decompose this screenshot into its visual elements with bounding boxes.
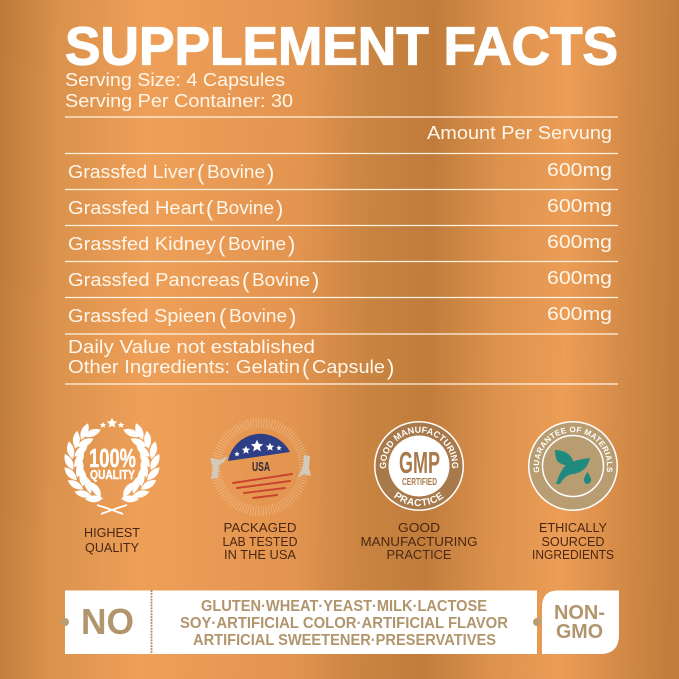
label: good manufacturing practice: MANUFACTURING [360,534,478,549]
icon text: GMP certified [399,445,440,488]
row: spleen: Grassfed Spieen [68,306,216,326]
row: liver: 600mg [547,160,612,180]
row: pancreas [68,268,612,293]
row: spleen [68,304,612,329]
row: heart: Grassfed Heart [68,198,204,218]
table header: Amount Per Servung [427,123,612,143]
footnotes: Capsule [312,357,385,377]
serving information: Serving Size: 4 Capsules [65,70,285,90]
icon: laurel wreath [62,418,162,514]
label: highest quality [84,525,140,555]
row: liver: ( [197,160,205,185]
icon: seal rings [528,421,618,511]
panel: non-GMO tag [542,590,619,654]
label: ethically sourced ingredients [532,520,614,562]
row: kidney: 600mg [547,232,612,252]
panel: non-GMO tag: GMO [556,621,603,643]
excluded ingredients list: GLUTEN·WHEAT·YEAST·MILK·LACTOSE [201,598,487,615]
panel: free-from banner [61,590,541,654]
NO text: NO [81,601,134,642]
row: liver: Grassfed Liver [68,162,195,182]
footnotes: Other Ingredients: Gelatin [68,357,300,377]
icon text: 100% quality: 100% [89,443,136,473]
badge: guarantee of materials [528,421,618,562]
row: heart [68,196,612,221]
row: heart: Bovine [216,198,274,218]
icon text: 100% quality [89,443,136,482]
label: ethically sourced ingredients: ETHICALLY [539,520,607,535]
row: heart: ( [206,196,214,221]
row: pancreas: ) [312,268,319,293]
icon: blue dome with stars [228,434,290,461]
row: kidney: Grassfed Kidney [68,234,216,254]
label: ethically sourced ingredients: SOURCED [542,534,604,549]
row: spleen: Bovine [229,306,287,326]
footnotes: Daily Value not established [68,337,315,357]
label: highest quality: HIGHEST [84,525,140,540]
row: liver: Bovine [207,162,265,182]
row: spleen: ( [219,304,227,329]
row: pancreas: Grassfed Pancreas [68,270,240,290]
label: good manufacturing practice [360,520,478,562]
icon: red stripes [233,474,292,498]
icon text: ring text: PRACTICE [394,492,444,506]
supplement facts table [65,117,618,384]
label: packaged lab tested: IN THE USA [224,547,296,562]
label: packaged lab tested: PACKAGED [224,520,296,535]
row: kidney: ( [218,232,226,257]
panel: non-GMO tag: NON- [554,602,605,624]
icon text: 100% quality: QUALITY [90,468,136,482]
row: pancreas: 600mg [547,268,612,288]
row: kidney: ) [288,232,295,257]
icon text: GMP certified: GMP [399,445,440,480]
label: ethically sourced ingredients: INGREDIENTS [532,547,614,562]
serving information: Serving Per Container: 30 [65,91,293,111]
row: kidney [68,232,612,257]
row: heart: 600mg [547,196,612,216]
label: packaged lab tested [222,520,298,562]
badge: 100% quality [62,418,162,555]
row: kidney: Bovine [228,234,286,254]
icon text: GMP certified: CERTIFIED [402,477,437,488]
icon: teal leaves and drop [555,450,591,484]
serving information [65,70,293,111]
excluded ingredients list: ARTIFICIAL SWEETENER·PRESERVATIVES [193,632,496,649]
footnotes: ) [387,355,394,380]
icon: sun rays [216,423,304,511]
row: spleen: ) [289,304,296,329]
icon: ribbon ends [210,455,311,479]
label: good manufacturing practice: GOOD [398,520,440,535]
excluded ingredients list [180,598,508,649]
label: highest quality: QUALITY [85,540,139,555]
badge: GMP certified [360,421,478,562]
row: spleen: 600mg [547,304,612,324]
row: liver: ) [267,160,274,185]
icon text: ring text: GOOD MANUFACTURING [380,426,458,468]
footnotes: ( [302,355,310,380]
icon: GMP rings [374,421,464,511]
footnotes [68,337,394,380]
label: packaged lab tested: LAB TESTED [222,534,298,549]
icon text: USA: USA [252,460,270,474]
icon text: guarantee of materials: GUARANTEE OF MATERIALS [533,426,612,472]
label: good manufacturing practice: PRACTICE [386,547,452,562]
badge: packaged in the USA [210,423,311,562]
excluded ingredients list: SOY·ARTIFICIAL COLOR·ARTIFICIAL FLAVOR [180,615,508,632]
row: heart: ) [276,196,283,221]
title: SUPPLEMENT FACTS [65,16,618,76]
row: liver [68,160,612,185]
icon text: ring text [380,426,458,506]
row: pancreas: ( [242,268,250,293]
row: pancreas: Bovine [252,270,310,290]
